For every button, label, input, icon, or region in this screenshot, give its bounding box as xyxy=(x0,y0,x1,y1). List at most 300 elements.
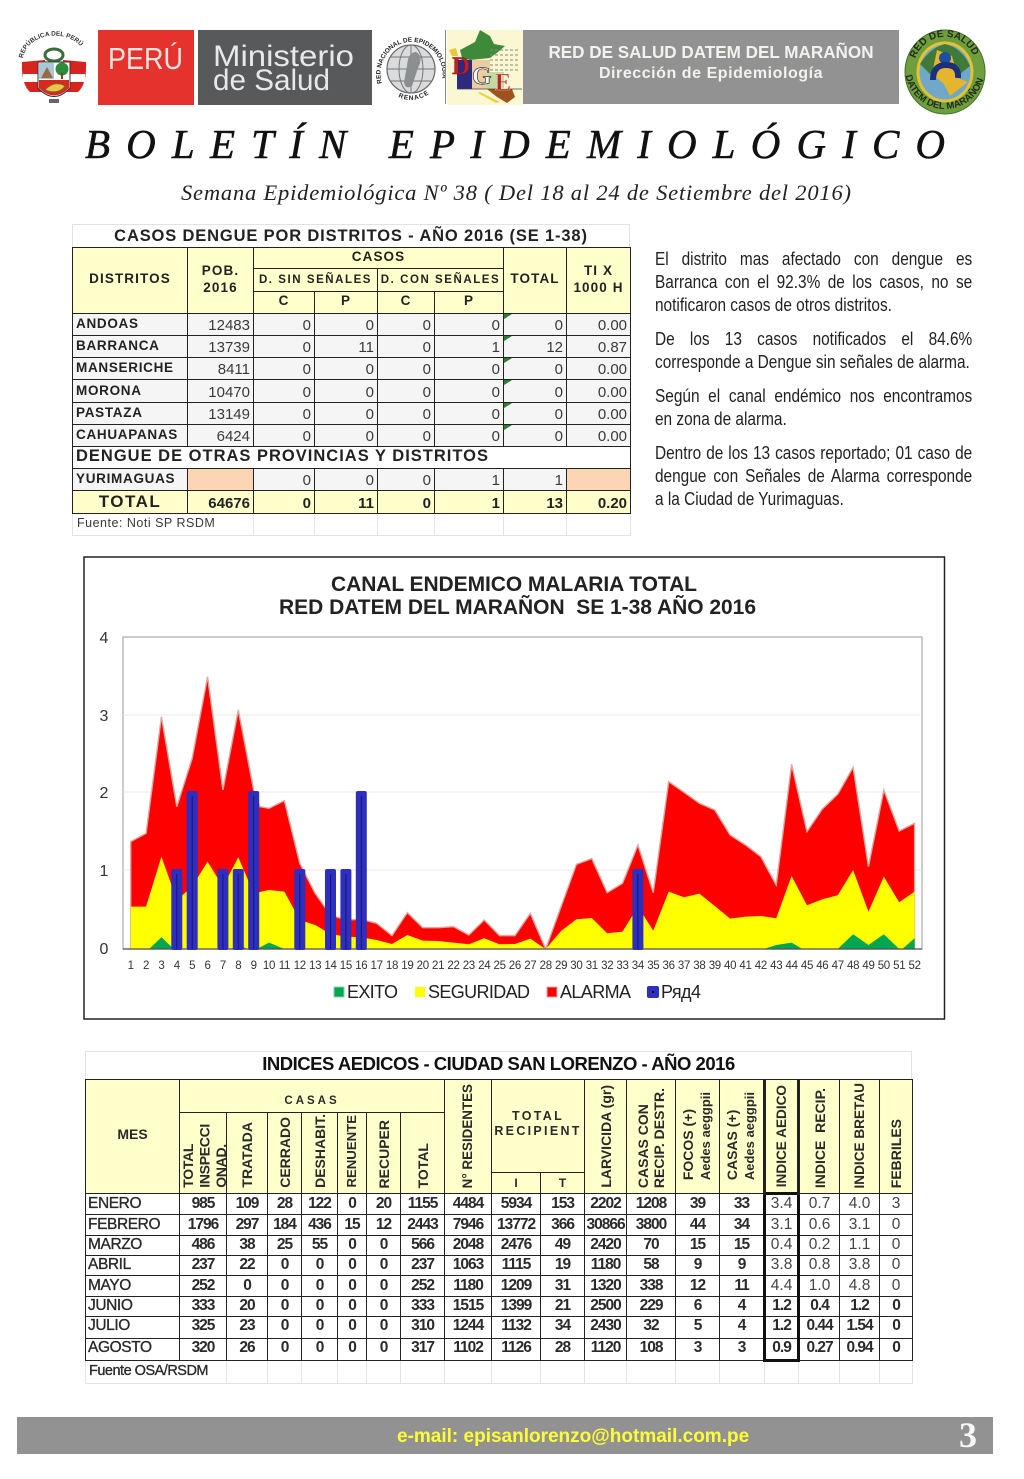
table: índices aédicos: FOCOS (+) xyxy=(680,1109,696,1180)
table: índices aédicos: Aedes aeggpii xyxy=(742,1092,757,1180)
table: casos dengue por distritos: 0 xyxy=(423,361,431,378)
table: casos dengue por distritos: 0 xyxy=(303,339,311,356)
table: índices aédicos: 0 xyxy=(348,1317,356,1334)
table: índices aédicos: 1796 xyxy=(188,1216,218,1233)
table: índices aédicos: 49 xyxy=(555,1236,570,1253)
text block: resumen dengue: De los 13 casos notificados el 84.6% xyxy=(655,329,972,349)
table: índices aédicos: MAYO xyxy=(88,1277,131,1294)
chart title: CANAL ENDEMICO MALARIA TOTAL xyxy=(331,573,697,596)
x axis labels: 35 xyxy=(647,960,659,972)
table: índices aédicos: INDICE BRETAU xyxy=(852,1083,867,1188)
table: casos dengue por distritos: 0 xyxy=(366,317,374,334)
table: índices aédicos: MARZO xyxy=(88,1236,142,1253)
table: casos dengue por distritos: P xyxy=(341,293,351,308)
table: índices aédicos: 15 xyxy=(734,1236,749,1253)
text block: resumen dengue: notificaron casos de otros distritos. xyxy=(655,295,892,315)
table: índices aédicos: 2430 xyxy=(590,1317,621,1334)
x axis labels: 42 xyxy=(755,960,767,972)
title xyxy=(85,121,945,205)
logo: escudo del Perú xyxy=(18,31,86,103)
table: índices aédicos: 3.8 xyxy=(771,1256,792,1273)
table: índices aédicos: TOTAL xyxy=(512,1109,564,1123)
table: índices aédicos: 28 xyxy=(555,1339,570,1356)
table: índices aédicos: 2476 xyxy=(501,1236,531,1253)
aedic table heading xyxy=(85,1051,912,1079)
logo: RENACE: RED NACIONAL DE EPIDEMIOLOGIA xyxy=(376,37,445,84)
x axis labels: 19 xyxy=(401,960,414,972)
x axis labels: 44 xyxy=(785,960,799,972)
table: índices aédicos: 0 xyxy=(281,1339,288,1356)
x axis labels: 29 xyxy=(555,960,567,972)
logo: RENACE xyxy=(376,30,446,104)
x axis labels: 32 xyxy=(601,960,613,972)
table: casos dengue por distritos: 0.00 xyxy=(598,428,627,445)
x axis labels: 21 xyxy=(432,960,444,972)
table: índices aédicos: 1320 xyxy=(590,1277,621,1294)
table: índices aédicos: Fuente OSA/RSDM xyxy=(89,1363,208,1379)
table: índices aédicos: TRATADA xyxy=(239,1122,255,1188)
bar series: Ряд4 xyxy=(171,791,643,950)
table: índices aédicos: 1126 xyxy=(501,1339,531,1356)
table: índices aédicos: 1209 xyxy=(501,1277,531,1294)
table: casos dengue por distritos: PASTAZA xyxy=(76,405,143,420)
table: índices aédicos: 0 xyxy=(380,1277,387,1294)
table: índices aédicos: 20 xyxy=(239,1297,255,1314)
x axis labels: 12 xyxy=(294,960,306,972)
title: Semana Epidemiológica Nº 38 ( Del 18 al 24 de Setiembre del 2016) xyxy=(181,180,851,205)
table: índices aédicos: CASAS (+) xyxy=(724,1110,740,1180)
x axis labels: 11 xyxy=(279,960,290,972)
table: índices aédicos xyxy=(85,1079,913,1384)
logo: PERÚ Ministerio de Salud: de Salud xyxy=(213,64,330,97)
table: índices aédicos: 0 xyxy=(892,1297,900,1314)
dengue table heading: CASOS DENGUE POR DISTRITOS - AÑO 2016 (SE 1-38) xyxy=(114,227,588,245)
x axis labels: 15 xyxy=(340,960,352,972)
table: casos dengue por distritos: 0.00 xyxy=(598,384,627,400)
x axis labels: 49 xyxy=(862,960,875,972)
table: casos dengue por distritos: 12 xyxy=(546,339,563,356)
table: índices aédicos: 4484 xyxy=(453,1195,483,1212)
table: índices aédicos: FEBRERO xyxy=(88,1216,160,1233)
table: índices aédicos: 19 xyxy=(555,1256,570,1273)
table: índices aédicos: 6 xyxy=(694,1297,701,1314)
table: índices aédicos: TOTAL xyxy=(180,1144,196,1188)
table: índices aédicos: 297 xyxy=(236,1216,258,1233)
table: índices aédicos: JUNIO xyxy=(88,1297,133,1314)
table: casos dengue por distritos: 0 xyxy=(555,384,563,400)
table: índices aédicos: 1155 xyxy=(408,1195,437,1212)
table: índices aédicos: 25 xyxy=(277,1236,292,1253)
x axis labels: 25 xyxy=(493,960,506,972)
table: índices aédicos: MES xyxy=(117,1126,148,1142)
table: casos dengue por distritos: 0.87 xyxy=(598,339,627,356)
x axis labels: 3 xyxy=(158,960,164,972)
page number: 3 xyxy=(959,1415,977,1455)
table: índices aédicos: RECUPER xyxy=(376,1120,392,1188)
x axis labels: 26 xyxy=(509,960,521,972)
table: índices aédicos: 0 xyxy=(316,1277,323,1294)
x axis labels: 17 xyxy=(370,960,383,972)
table: casos dengue por distritos: CASOS xyxy=(352,249,405,264)
table: casos dengue por distritos: 0 xyxy=(492,428,500,445)
table: índices aédicos: 20 xyxy=(376,1195,391,1212)
table: casos dengue por distritos: 13 xyxy=(546,494,563,512)
table: casos dengue por distritos: 0 xyxy=(303,361,311,378)
legend: Ряд4 xyxy=(661,982,701,1002)
aedic table heading: INDICES AEDICOS - CIUDAD SAN LORENZO - AÑO 2016 xyxy=(262,1053,735,1074)
table: índices aédicos: 3.4 xyxy=(771,1195,792,1212)
table: índices aédicos: 108 xyxy=(640,1339,662,1356)
table: índices aédicos: 0 xyxy=(380,1236,387,1253)
x axis labels: 27 xyxy=(524,960,536,972)
table: índices aédicos: 1399 xyxy=(501,1297,531,1314)
table: índices aédicos: T xyxy=(559,1176,566,1190)
table: índices aédicos: 0 xyxy=(316,1256,323,1273)
table: índices aédicos: 2202 xyxy=(590,1195,621,1212)
table: índices aédicos: 0 xyxy=(892,1236,900,1253)
table: casos dengue por distritos: 0 xyxy=(423,472,431,489)
table: casos dengue por distritos: POB. xyxy=(202,263,239,278)
table: casos dengue por distritos: 1 xyxy=(492,472,500,489)
table: índices aédicos: 317 xyxy=(411,1339,434,1356)
table: índices aédicos: 0 xyxy=(892,1256,900,1273)
table: índices aédicos: 34 xyxy=(555,1317,570,1334)
table: casos dengue por distritos: 0.00 xyxy=(598,406,627,423)
table: casos dengue por distritos: 0.00 xyxy=(598,317,627,334)
table: casos dengue por distritos: 0 xyxy=(423,406,431,423)
table: casos dengue por distritos: 0 xyxy=(303,472,311,489)
x axis labels: 39 xyxy=(709,960,721,972)
x axis labels: 30 xyxy=(570,960,583,972)
logo: Red de Salud Datem del Marañon xyxy=(904,30,986,114)
table: índices aédicos: INDICE RECIP. xyxy=(812,1088,828,1188)
table: índices aédicos: 1.1 xyxy=(849,1236,870,1253)
table: casos dengue por distritos: 0 xyxy=(366,472,374,489)
table: índices aédicos: 237 xyxy=(192,1256,214,1273)
table: casos dengue por distritos: 0 xyxy=(303,384,311,400)
text block: resumen dengue: dengue con Señales de Alarma corresponde xyxy=(655,466,972,486)
table: índices aédicos: 3.1 xyxy=(771,1216,792,1233)
table: índices aédicos: 31 xyxy=(555,1277,570,1294)
table: índices aédicos: 12 xyxy=(376,1216,391,1233)
table: índices aédicos: 1515 xyxy=(453,1297,483,1314)
table: índices aédicos: JULIO xyxy=(88,1317,130,1334)
table: casos dengue por distritos: 1 xyxy=(492,494,500,512)
x axis labels: 36 xyxy=(662,960,675,972)
table: índices aédicos: 32 xyxy=(643,1317,659,1334)
table: casos dengue por distritos: 0 xyxy=(492,406,500,423)
table: índices aédicos: 1.0 xyxy=(809,1277,830,1294)
table: casos dengue por distritos: 10470 xyxy=(208,384,250,400)
table: casos dengue por distritos: 8411 xyxy=(218,361,250,378)
table: índices aédicos: 0 xyxy=(281,1277,288,1294)
table: índices aédicos: 0 xyxy=(348,1195,356,1212)
table: casos dengue por distritos: 11 xyxy=(358,494,374,512)
table: casos dengue por distritos: 0 xyxy=(492,384,500,400)
table: índices aédicos: 12 xyxy=(690,1277,705,1294)
table: casos dengue por distritos: MANSERICHE xyxy=(76,360,174,375)
table: índices aédicos: 237 xyxy=(411,1256,434,1273)
table: índices aédicos: 0.4 xyxy=(771,1236,792,1253)
x axis labels: 43 xyxy=(770,960,782,972)
table: índices aédicos: 229 xyxy=(640,1297,662,1314)
table: casos dengue por distritos xyxy=(72,247,631,536)
table: casos dengue por distritos: 0 xyxy=(303,317,311,334)
table: índices aédicos: RECIP. DESTR. xyxy=(651,1088,667,1188)
table: índices aédicos: 21 xyxy=(555,1297,570,1314)
x axis labels: 1 xyxy=(128,960,134,972)
table: índices aédicos: 15 xyxy=(690,1236,705,1253)
x axis labels: 34 xyxy=(632,960,645,972)
x axis labels: 52 xyxy=(908,960,921,972)
table: índices aédicos: 985 xyxy=(192,1195,214,1212)
table: índices aédicos: 44 xyxy=(690,1216,705,1233)
table: casos dengue por distritos: 0.20 xyxy=(598,494,627,512)
table: casos dengue por distritos: 0 xyxy=(303,406,311,423)
x axis labels: 28 xyxy=(540,960,552,972)
table: índices aédicos: RECIPIENT xyxy=(494,1124,582,1138)
table: índices aédicos: 0 xyxy=(380,1256,387,1273)
table: índices aédicos: 3.1 xyxy=(849,1216,870,1233)
table: casos dengue por distritos: C xyxy=(279,293,289,308)
table: casos dengue por distritos: 1 xyxy=(555,472,563,489)
legend: ALARMA xyxy=(560,982,631,1002)
table: índices aédicos: 55 xyxy=(312,1236,327,1253)
table: índices aédicos: 0 xyxy=(892,1339,900,1356)
header banner xyxy=(523,30,899,104)
table: índices aédicos: 0.9 xyxy=(772,1339,791,1356)
table: casos dengue por distritos: 0 xyxy=(366,361,374,378)
table: índices aédicos: 0 xyxy=(892,1216,900,1233)
table: índices aédicos: 28 xyxy=(277,1195,292,1212)
table: casos dengue por distritos: 0 xyxy=(555,317,563,334)
chart title xyxy=(279,573,756,619)
table: índices aédicos: 0.2 xyxy=(809,1236,830,1253)
table: índices aédicos: 1063 xyxy=(453,1256,483,1273)
logo: escudo del Perú: REPÚBLICA DEL PERÚ xyxy=(18,31,84,58)
table: casos dengue por distritos: 0 xyxy=(492,317,500,334)
table: casos dengue por distritos: Fuente: Noti SP RSDM xyxy=(77,516,215,530)
table: índices aédicos: 0 xyxy=(348,1277,356,1294)
x axis labels: 2 xyxy=(143,960,149,972)
table: índices aédicos: 0 xyxy=(892,1277,900,1294)
table: índices aédicos: 0.94 xyxy=(846,1339,873,1356)
table: casos dengue por distritos: TOTAL xyxy=(510,271,560,286)
table: casos dengue por distritos: 13739 xyxy=(208,339,250,356)
table: índices aédicos: 0 xyxy=(316,1339,323,1356)
table: índices aédicos: 22 xyxy=(239,1256,255,1273)
table: índices aédicos: 4.8 xyxy=(849,1277,870,1294)
table: índices aédicos: 26 xyxy=(239,1339,255,1356)
y axis labels: 3 xyxy=(100,708,109,725)
logo: Red de Salud Datem del Marañon: DATEM DEL MARAÑON xyxy=(906,74,984,110)
table: casos dengue por distritos: 0 xyxy=(423,494,431,512)
table: casos dengue por distritos: 0 xyxy=(423,384,431,400)
table: índices aédicos: 252 xyxy=(192,1277,214,1294)
x axis labels: 14 xyxy=(324,960,337,972)
x axis labels: 18 xyxy=(386,960,398,972)
table: índices aédicos: FEBRILES xyxy=(888,1119,904,1188)
logo: PERÚ Ministerio de Salud xyxy=(98,30,372,105)
y axis labels: 4 xyxy=(100,630,109,647)
text block: resumen dengue: Según el canal endémico nos encontramos xyxy=(655,386,972,406)
text block: resumen dengue: en zona de alarma. xyxy=(655,409,787,429)
x axis labels: 22 xyxy=(447,960,460,972)
logo: DGE: E xyxy=(495,70,511,96)
x axis labels: 51 xyxy=(893,960,905,972)
table: casos dengue por distritos: C xyxy=(401,293,411,308)
y axis labels: 1 xyxy=(100,863,109,880)
x axis labels: 23 xyxy=(463,960,475,972)
table: índices aédicos: 9 xyxy=(738,1256,745,1273)
x axis labels: 5 xyxy=(189,960,195,972)
table: índices aédicos: CASAS xyxy=(284,1095,340,1107)
table: casos dengue por distritos: 0 xyxy=(555,406,563,423)
header banner: RED DE SALUD DATEM DEL MARAÑON xyxy=(548,43,874,62)
x axis labels: 46 xyxy=(816,960,828,972)
x axis labels: 33 xyxy=(616,960,629,972)
table: índices aédicos: 310 xyxy=(411,1317,434,1334)
text block: resumen dengue: corresponde a Dengue sin señales de alarma. xyxy=(655,352,970,372)
area series: alarma, seguridad, exito xyxy=(131,677,915,949)
x axis labels: 48 xyxy=(847,960,859,972)
text block: resumen dengue: a la Ciudad de Yurimaguas. xyxy=(655,489,844,509)
table: índices aédicos: 566 xyxy=(411,1236,434,1253)
logo: DGE: G xyxy=(472,63,491,90)
y axis labels xyxy=(100,630,109,958)
logo: PERÚ Ministerio de Salud: Ministerio xyxy=(213,40,354,73)
table: índices aédicos: 0 xyxy=(281,1317,288,1334)
title: B O L E T Í N E P I D E M I O L Ó G I C O xyxy=(85,121,945,167)
table: índices aédicos: 4.0 xyxy=(849,1195,870,1212)
table: casos dengue por distritos: 0 xyxy=(423,428,431,445)
table: índices aédicos: 1.2 xyxy=(772,1317,791,1334)
table: índices aédicos: 0 xyxy=(380,1297,387,1314)
table: índices aédicos: 184 xyxy=(273,1216,296,1233)
table: casos dengue por distritos: 64676 xyxy=(208,494,250,512)
table: índices aédicos: 2420 xyxy=(590,1236,621,1253)
table: índices aédicos: 0 xyxy=(348,1297,356,1314)
table: índices aédicos: 4 xyxy=(738,1317,745,1334)
table: casos dengue por distritos: MORONA xyxy=(76,383,142,398)
table: índices aédicos: 13772 xyxy=(497,1216,535,1233)
table: índices aédicos: 252 xyxy=(411,1277,434,1294)
table: índices aédicos: 4.4 xyxy=(771,1277,792,1294)
table: índices aédicos: 0 xyxy=(892,1317,900,1334)
table: índices aédicos: 1120 xyxy=(591,1339,620,1356)
table: índices aédicos: 0 xyxy=(348,1339,356,1356)
table: índices aédicos: AGOSTO xyxy=(88,1339,152,1356)
table: casos dengue por distritos: 0 xyxy=(303,494,311,512)
table: índices aédicos: 2500 xyxy=(590,1297,621,1314)
table: índices aédicos: ENERO xyxy=(88,1195,141,1212)
table: índices aédicos: 338 xyxy=(640,1277,662,1294)
table: casos dengue por distritos: 0 xyxy=(366,406,374,423)
table: índices aédicos: 333 xyxy=(411,1297,434,1314)
table: índices aédicos: DESHABIT. xyxy=(312,1114,328,1188)
x axis labels: 37 xyxy=(678,960,690,972)
table: casos dengue por distritos: D. SIN SEÑALES xyxy=(259,274,372,286)
logo: Red de Salud Datem del Marañon: RED DE SALUD xyxy=(909,30,978,58)
table: casos dengue por distritos: 12483 xyxy=(208,317,250,334)
x axis labels: 10 xyxy=(263,960,275,972)
table: índices aédicos: 3 xyxy=(694,1339,701,1356)
table: índices aédicos: 11 xyxy=(734,1277,749,1294)
table: casos dengue por distritos: 0.00 xyxy=(598,361,627,378)
table: casos dengue por distritos: 0 xyxy=(423,339,431,356)
dengue table heading xyxy=(72,224,630,247)
table: índices aédicos: 33 xyxy=(734,1195,749,1212)
table: índices aédicos: RENUENTE xyxy=(344,1115,359,1188)
header banner: Dirección de Epidemiología xyxy=(599,65,823,82)
table: índices aédicos: INDICE AEDICO xyxy=(774,1085,789,1187)
table: índices aédicos: 30866 xyxy=(586,1216,625,1233)
table: índices aédicos: 3800 xyxy=(636,1216,666,1233)
table: índices aédicos: TOTAL xyxy=(415,1143,431,1188)
table: casos dengue por distritos: 2016 xyxy=(203,280,238,295)
x axis labels: 38 xyxy=(693,960,706,972)
table: casos dengue por distritos: CAHUAPANAS xyxy=(76,427,178,442)
table: índices aédicos: INSPECCI xyxy=(196,1124,212,1188)
table: índices aédicos: 0.6 xyxy=(809,1216,830,1233)
table: índices aédicos: Aedes aeggpii xyxy=(698,1092,713,1180)
table: índices aédicos: 436 xyxy=(308,1216,331,1233)
table: casos dengue por distritos: P xyxy=(464,293,474,308)
table: índices aédicos: 1180 xyxy=(453,1277,483,1294)
table: casos dengue por distritos: 0 xyxy=(423,317,431,334)
text block: resumen dengue: Barranca con el 92.3% de los casos, no se xyxy=(655,272,972,292)
x axis labels: 45 xyxy=(801,960,813,972)
legend: EXITO xyxy=(347,982,398,1002)
x axis labels: 47 xyxy=(832,960,844,972)
table: casos dengue por distritos: 11 xyxy=(358,339,374,356)
table: casos dengue por distritos: 0 xyxy=(555,428,563,445)
table: índices aédicos: 23 xyxy=(239,1317,255,1334)
table: índices aédicos: 0.4 xyxy=(810,1297,829,1314)
table: índices aédicos: 7946 xyxy=(453,1216,483,1233)
table: índices aédicos: 34 xyxy=(734,1216,749,1233)
table: casos dengue por distritos: TOTAL xyxy=(99,492,161,511)
table: casos dengue por distritos: DISTRITOS xyxy=(89,271,171,286)
table: casos dengue por distritos: 0 xyxy=(555,361,563,378)
table: índices aédicos: 0 xyxy=(316,1317,323,1334)
table: índices aédicos: LARVICIDA (gr) xyxy=(598,1085,614,1188)
table: índices aédicos: 0 xyxy=(348,1236,356,1253)
table: índices aédicos: 2048 xyxy=(453,1236,483,1253)
table: índices aédicos: CASAS CON xyxy=(635,1104,651,1188)
table: índices aédicos: 0 xyxy=(316,1297,323,1314)
table: índices aédicos: 0 xyxy=(281,1256,288,1273)
table: índices aédicos: 1.2 xyxy=(850,1297,869,1314)
table: índices aédicos: 333 xyxy=(192,1297,214,1314)
text block: resumen dengue: Dentro de los 13 casos reportado; 01 caso de xyxy=(655,443,972,463)
table: índices aédicos: ABRIL xyxy=(88,1256,131,1273)
table: casos dengue por distritos: 0 xyxy=(366,428,374,445)
x axis labels: 31 xyxy=(586,960,598,972)
table: casos dengue por distritos: 0 xyxy=(492,361,500,378)
table: índices aédicos: 15 xyxy=(344,1216,360,1233)
table: índices aédicos: 0.7 xyxy=(809,1195,830,1212)
table: casos dengue por distritos: BARRANCA xyxy=(76,338,160,353)
chart: canal endémico malaria xyxy=(83,556,946,1020)
table: índices aédicos: 39 xyxy=(690,1195,705,1212)
table: índices aédicos: CERRADO xyxy=(276,1117,292,1188)
table: índices aédicos: 0 xyxy=(380,1339,387,1356)
table: índices aédicos: 153 xyxy=(551,1195,574,1212)
footer email: e-mail: episanlorenzo@hotmail.com.pe xyxy=(397,1426,749,1447)
x axis labels: 9 xyxy=(251,960,257,972)
x axis labels: 13 xyxy=(309,960,321,972)
